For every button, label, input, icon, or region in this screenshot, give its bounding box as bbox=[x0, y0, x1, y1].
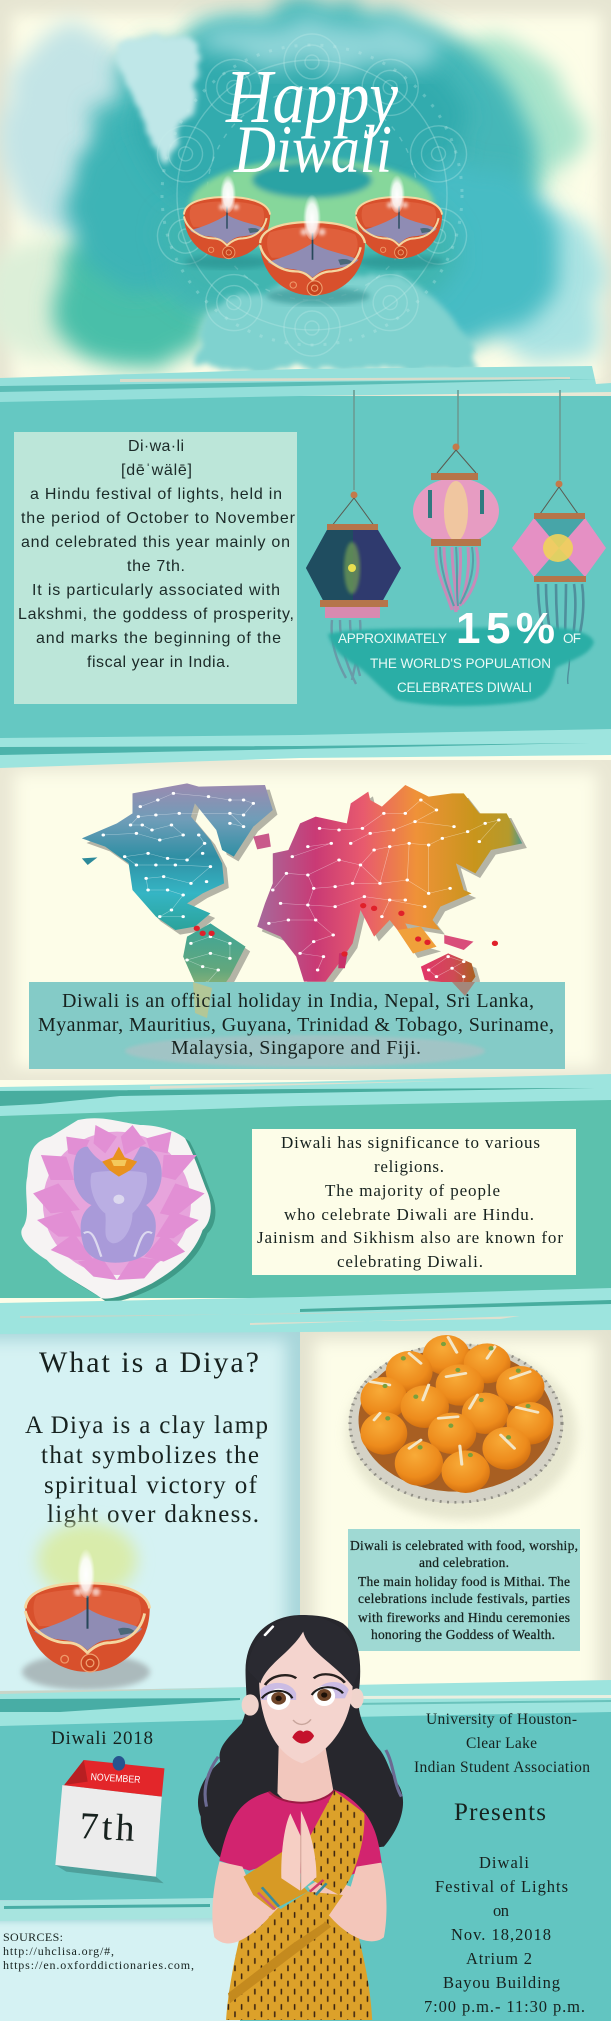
text: food: celebrations include festivals, parties bbox=[358, 1591, 570, 1606]
text: diya description: spiritual victory of bbox=[44, 1472, 258, 1499]
text: diya description: that symbolizes the bbox=[41, 1442, 259, 1469]
text: food bbox=[350, 1538, 578, 1642]
text: diya description: A Diya is a clay lamp bbox=[25, 1412, 268, 1439]
callout: 15 percent statistic: OF bbox=[563, 631, 581, 646]
text: definition: Lakshmi, the goddess of prosperity, bbox=[18, 606, 294, 623]
icon: tri-colour lantern bbox=[512, 390, 606, 684]
text: food: honoring the Goddess of Wealth. bbox=[371, 1627, 555, 1642]
text: sources: http://uhclisa.org/#, bbox=[3, 1944, 114, 1958]
text: event name and time: on bbox=[493, 1901, 509, 1920]
illustration: woman in sari bbox=[198, 1615, 403, 2020]
text: religions: Jainism and Sikhism also are known for bbox=[257, 1228, 563, 1247]
icon: calendar bbox=[55, 1756, 164, 1883]
text: event name and time: Atrium 2 bbox=[466, 1949, 532, 1968]
text: definition: and celebrated this year mainly on bbox=[21, 534, 290, 551]
text: religions: The majority of people bbox=[325, 1181, 500, 1200]
text: event name and time: 7:00 p.m.- 11:30 p.m. bbox=[424, 1997, 585, 2016]
text: sources bbox=[3, 1930, 194, 1972]
decoration: fifth brush band bbox=[0, 1680, 611, 1726]
map: North America and Greenland bbox=[82, 783, 273, 930]
neck bbox=[277, 1747, 333, 1806]
panel: hero background bbox=[0, 0, 611, 400]
text: food: with fireworks and Hindu ceremonies bbox=[358, 1610, 570, 1625]
text: holiday countries: Diwali is an official holiday in India, Nepal, Sri Lanka, bbox=[62, 990, 534, 1012]
callout: 15 percent statistic bbox=[328, 604, 594, 706]
map: network dots bbox=[103, 793, 499, 1008]
icon: single diya bbox=[22, 1523, 150, 1690]
title: Happy Diwali: Diwali bbox=[233, 111, 392, 187]
lips bbox=[292, 1731, 314, 1744]
map: South America bbox=[183, 923, 246, 1018]
text: event name and time: Bayou Building bbox=[443, 1973, 560, 1992]
text: event details bbox=[414, 1711, 590, 2016]
text: definition: Di·wa·li bbox=[128, 438, 184, 455]
text: holiday countries: Malaysia, Singapore and Fiji. bbox=[171, 1037, 421, 1059]
panel: definition section background bbox=[0, 396, 611, 741]
text: food: The main holiday food is Mithai. The bbox=[358, 1574, 570, 1589]
face bbox=[259, 1630, 353, 1763]
text: holiday countries: Myanmar, Mauritius, Guyana, Trinidad & Tobago, Suriname, bbox=[38, 1014, 554, 1036]
text: definition: and marks the beginning of the bbox=[36, 630, 281, 647]
text: food: and celebration. bbox=[419, 1555, 509, 1570]
bangles bbox=[258, 1880, 327, 1909]
map: Europe Africa Asia bbox=[257, 785, 522, 982]
text: diya description: light over dakness. bbox=[47, 1501, 259, 1528]
arms bbox=[212, 1862, 387, 1943]
heading: What is a Diya: What is a Diya? bbox=[39, 1346, 259, 1379]
heading: Presents: Presents bbox=[454, 1799, 546, 1826]
decoration: second brush band bbox=[0, 729, 611, 768]
panel: event section background bbox=[0, 1710, 611, 2021]
map: Australia bbox=[421, 953, 475, 993]
panel: religions text box bbox=[252, 1129, 576, 1275]
decoration: mandala bbox=[150, 34, 474, 356]
text: religions: who celebrate Diwali are Hindu. bbox=[284, 1205, 534, 1224]
panel: world map section background bbox=[0, 760, 611, 1080]
text: holiday countries bbox=[38, 990, 554, 1059]
mithai balls bbox=[360, 1335, 553, 1493]
lotus petals bbox=[33, 1125, 205, 1280]
icon: plate of mithai bbox=[347, 1335, 577, 1520]
callout: 15 percent statistic: THE WORLD'S POPULATION bbox=[370, 656, 551, 671]
text: definition: the period of October to November bbox=[21, 510, 296, 527]
text: definition: the 7th. bbox=[127, 558, 185, 575]
panel: sources background bbox=[0, 1900, 260, 2021]
text: definition: It is particularly associated with bbox=[32, 582, 280, 599]
calendar month: NOVEMBER bbox=[90, 1772, 141, 1786]
hair back bbox=[198, 1615, 403, 1862]
icon: diya lamps bbox=[184, 173, 444, 305]
panel: holiday countries text box bbox=[29, 982, 565, 1069]
text: event name and time: Festival of Lights bbox=[435, 1877, 568, 1896]
callout: 15 percent statistic: APPROXIMATELY bbox=[338, 631, 447, 646]
panel: food text box bbox=[348, 1529, 580, 1651]
blouse bbox=[219, 1790, 382, 1883]
text: religions: celebrating Diwali. bbox=[337, 1252, 483, 1271]
panel: food right column bbox=[300, 1330, 611, 1700]
map: small islands bbox=[82, 833, 473, 968]
title: Happy Diwali: Happy bbox=[225, 55, 398, 139]
text: event name and time bbox=[424, 1853, 585, 2016]
text: event details: University of Houston- bbox=[426, 1711, 577, 1728]
title: Happy Diwali bbox=[225, 55, 398, 187]
elephant body bbox=[74, 1147, 162, 1263]
eyes bbox=[260, 1674, 349, 1710]
text: Diwali 2018: Diwali 2018 bbox=[51, 1728, 153, 1749]
icon: lotus elephant bbox=[21, 1118, 215, 1302]
hair front bbox=[247, 1615, 359, 1687]
crown bbox=[102, 1147, 137, 1177]
sari drape bbox=[310, 1791, 364, 1895]
text: religions: religions. bbox=[374, 1157, 444, 1176]
text: event name and time: Nov. 18,2018 bbox=[451, 1925, 551, 1944]
icon: dark lantern bbox=[306, 390, 401, 684]
text: event details: Indian Student Association bbox=[414, 1759, 590, 1776]
panel: diya explanation left column bbox=[0, 1330, 300, 1710]
decoration: green lamp glow bbox=[190, 159, 434, 251]
almond slivers and pistachios bbox=[370, 1337, 538, 1464]
nose bbox=[293, 1719, 311, 1724]
text: food: Diwali is celebrated with food, worship, bbox=[350, 1538, 578, 1553]
panel: religion section background bbox=[0, 1098, 611, 1298]
text: event details: Clear Lake bbox=[466, 1735, 537, 1752]
text: sources: SOURCES: bbox=[3, 1930, 63, 1944]
text: event name and time: Diwali bbox=[479, 1853, 529, 1872]
decoration: third brush band bbox=[0, 1074, 611, 1116]
chart: world map bbox=[82, 783, 527, 1023]
sari skirt bbox=[226, 1890, 372, 2020]
callout: 15 percent statistic: 15% bbox=[456, 604, 555, 653]
text: religions: Diwali has significance to various bbox=[281, 1133, 540, 1152]
text: definition: fiscal year in India. bbox=[87, 654, 230, 671]
praying hands bbox=[281, 1811, 316, 1891]
text: diya description bbox=[25, 1412, 268, 1528]
text: calendar date: 7th bbox=[79, 1805, 136, 1850]
callout: 15 percent statistic: CELEBRATES DIWALI bbox=[397, 680, 532, 695]
map: red location dots bbox=[194, 903, 498, 957]
decoration: upper brush band bbox=[0, 366, 611, 402]
decoration: sources brush band bbox=[0, 1898, 215, 1921]
ears bbox=[242, 1688, 364, 1716]
text: definition bbox=[18, 438, 296, 671]
text: sources: https://en.oxforddictionaries.com, bbox=[3, 1958, 194, 1972]
icon: pink lantern bbox=[413, 390, 499, 612]
decoration: fourth brush band bbox=[0, 1288, 611, 1334]
icon: hanging lanterns bbox=[306, 390, 606, 684]
text: definition: a Hindu festival of lights, held in bbox=[30, 486, 282, 503]
text: religions bbox=[257, 1133, 563, 1271]
panel: definition text box bbox=[14, 432, 297, 704]
text: definition: [dēˈwälē] bbox=[121, 462, 192, 479]
lotus base bbox=[43, 1132, 191, 1275]
